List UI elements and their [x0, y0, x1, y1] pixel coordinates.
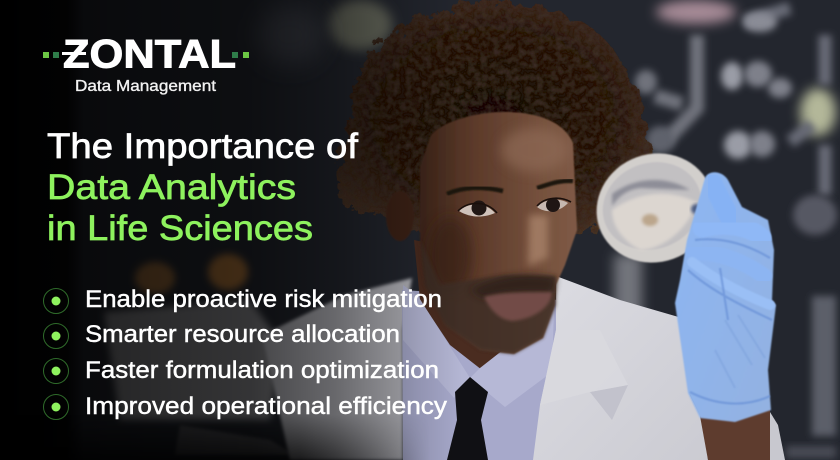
- gloved hand: [675, 172, 776, 422]
- logo: right green squares: [232, 52, 249, 58]
- forehead highlight: [501, 128, 569, 172]
- neck: [414, 240, 560, 370]
- benefits list: [44, 286, 447, 420]
- lips: [484, 292, 552, 321]
- tie: [447, 377, 488, 460]
- mustache: [470, 275, 556, 298]
- logo: [43, 32, 249, 95]
- title: line two: Data Analytics: [47, 168, 296, 207]
- hair: [338, 1, 649, 235]
- lab coat: [533, 276, 785, 460]
- bullet two: Smarter resource allocation: [85, 321, 400, 348]
- beard: [420, 240, 556, 354]
- cheek shadow: [428, 217, 472, 293]
- bullet four: Improved operational efficiency: [85, 393, 447, 420]
- bullet one: Enable proactive risk mitigation: [85, 286, 442, 313]
- right eye and brow: [537, 181, 573, 212]
- wrist: [700, 408, 770, 460]
- logo: left green squares: [43, 52, 59, 58]
- left eye and brow: [447, 188, 503, 217]
- nose highlight: [528, 215, 548, 266]
- logo: Z crossbar: [62, 52, 86, 55]
- scientist: [338, 1, 785, 460]
- title: line one: The Importance of: [47, 127, 358, 166]
- bullet three: Faster formulation optimization: [85, 357, 439, 384]
- background: blurred microscope at lower left: [104, 254, 412, 460]
- title: [47, 127, 358, 248]
- shirt: [402, 290, 560, 460]
- logo: wordmark: ZONTAL: [63, 32, 236, 76]
- logo: subtitle: Data Management: [75, 78, 217, 95]
- overlay: dark bottom fade: [82, 420, 422, 460]
- collar: [403, 285, 554, 407]
- ear: [386, 191, 414, 241]
- face: [420, 112, 577, 354]
- title: line three: in Life Sciences: [47, 209, 313, 248]
- background: blurred molecule diagram: [256, 0, 837, 458]
- petri dish: [581, 137, 729, 279]
